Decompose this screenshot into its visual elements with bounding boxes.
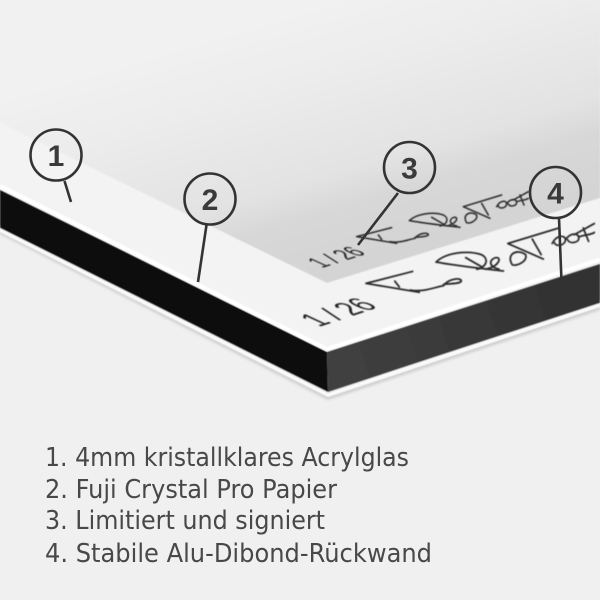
bottom white lip with shadow <box>0 226 600 400</box>
legend list <box>45 443 432 569</box>
glossy acrylic front edge <box>0 186 600 349</box>
callout 4 <box>530 167 581 294</box>
edition number large: 1 / 26 <box>292 295 386 330</box>
legend item 3: 3. Limitiert und signiert <box>45 506 325 536</box>
callout 1 <box>30 130 82 202</box>
black left side of the board <box>0 190 328 392</box>
callout 4: 4 <box>547 178 564 210</box>
edition number small: 1 / 26 <box>300 244 372 270</box>
signature scribble small <box>357 192 528 243</box>
dark grey right side of the board <box>327 264 600 392</box>
white paper border <box>0 123 600 350</box>
legend item 1: 1. 4mm kristallklares Acrylglas <box>45 443 409 473</box>
callout 3 <box>358 142 435 245</box>
legend item 2: 2. Fuji Crystal Pro Papier <box>45 475 337 505</box>
printed grey surface with shadow <box>0 0 600 283</box>
callout 2 <box>184 174 236 282</box>
callout 3: 3 <box>401 152 418 186</box>
legend item 4: 4. Stabile Alu-Dibond-Rückwand <box>45 539 432 569</box>
acrylic print panel <box>0 0 600 400</box>
small signature on print <box>292 192 594 330</box>
signature scribble large <box>366 224 594 292</box>
callout 1: 1 <box>48 140 64 173</box>
callout 2: 2 <box>202 184 218 217</box>
